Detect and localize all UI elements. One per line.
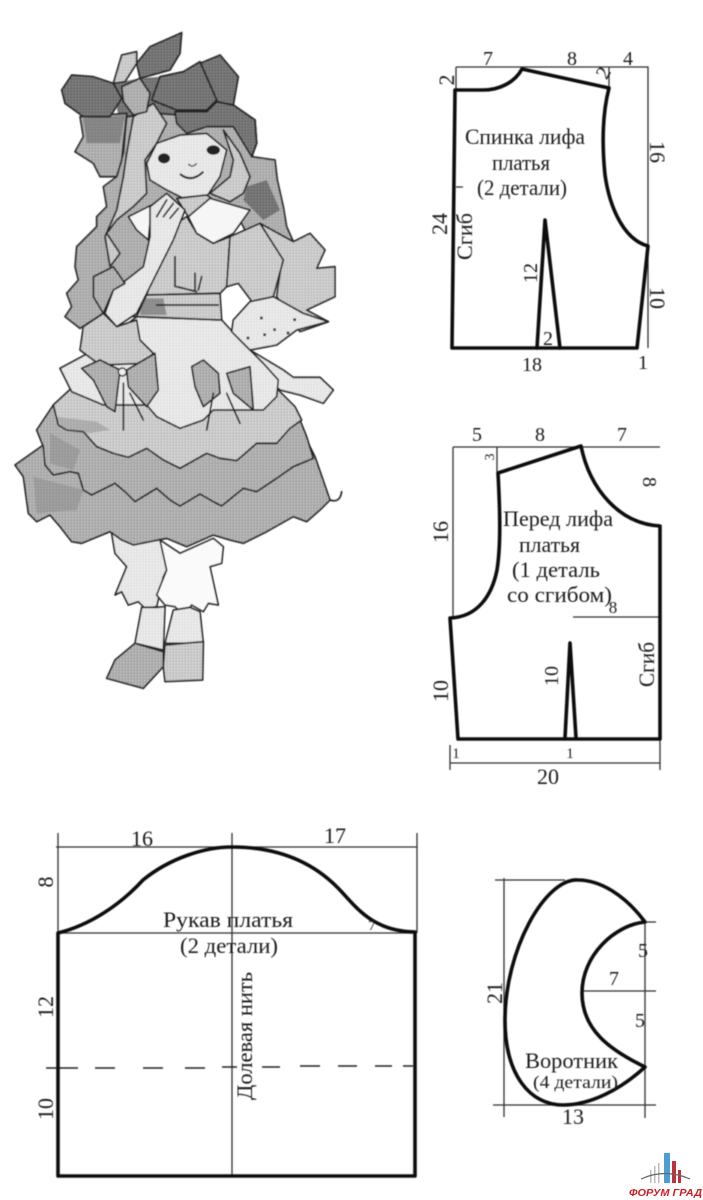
front bodice dart <box>565 643 576 738</box>
front bodice measurements: 1 <box>566 746 574 762</box>
logo: Forum Grad <box>629 1153 702 1199</box>
front bodice measurements: 16 <box>428 521 453 543</box>
top bow loop <box>137 33 182 78</box>
doll raised arm and hand <box>105 193 185 327</box>
doll eyes and mouth <box>158 145 220 178</box>
back bodice measurements: 24 <box>427 213 452 235</box>
front bodice title: Перед лифа <box>503 506 613 531</box>
doll belt shadow <box>140 298 167 315</box>
front bodice fold label: Сгиб <box>634 642 659 687</box>
sleeve measurements: 7 <box>368 918 376 934</box>
doll bow tail shadow <box>83 115 125 143</box>
doll puff sleeve <box>227 223 283 303</box>
doll bodice pleats <box>157 257 218 305</box>
back bodice fold label: Сгиб <box>452 213 477 260</box>
doll left collar <box>128 205 152 240</box>
doll face <box>147 133 227 200</box>
back bodice measurements: 2 <box>434 74 459 86</box>
sleeve measurements: 17 <box>324 823 346 848</box>
sleeve measurements: 16 <box>131 826 153 851</box>
bow knot <box>122 78 150 115</box>
front bodice measurements: 7 <box>617 424 627 446</box>
front bodice measurements: 8 <box>609 598 617 617</box>
back bodice measurements: 8 <box>567 48 577 70</box>
back bodice measurements: 18 <box>522 354 542 376</box>
small bow flower <box>113 52 137 83</box>
back bodice measurements: 10 <box>645 287 670 309</box>
doll hair dark side ringlets <box>243 180 280 220</box>
front bodice measurements: 5 <box>472 424 482 446</box>
sleeve measurements: 12 <box>33 996 58 1018</box>
sleeve title <box>163 907 293 958</box>
back bodice title: платья <box>492 150 550 175</box>
doll toy bunny <box>80 313 153 365</box>
doll right face lock <box>210 130 250 202</box>
doll right shoe <box>163 642 203 682</box>
sleeve title: (2 детали) <box>180 933 278 958</box>
doll skirt middle tier <box>37 390 313 506</box>
doll toy ear <box>93 267 125 313</box>
doll hair upper mass <box>65 102 293 328</box>
doll fingers <box>157 200 178 218</box>
front bodice measurements: 8 <box>638 477 660 487</box>
front bodice measurements: 1 <box>452 746 460 762</box>
collar measurements: 21 <box>482 982 507 1004</box>
front bodice measurements: 10 <box>428 680 453 702</box>
front bodice title <box>503 506 613 607</box>
back bodice outline <box>452 69 648 348</box>
collar title <box>525 1048 618 1093</box>
doll cuff <box>232 297 328 350</box>
doll bodice <box>147 217 230 295</box>
front bodice measurements: 8 <box>535 424 545 446</box>
sleeve outline <box>58 847 415 1176</box>
sleeve title: Рукав платья <box>163 907 293 932</box>
back bodice measurements: 2 <box>592 63 616 83</box>
front bodice measurements <box>428 424 660 789</box>
doll darker hair above forehead <box>175 102 257 157</box>
doll dress bow left <box>82 353 158 430</box>
sleeve grain label: Долевая нить <box>232 972 257 1100</box>
doll cuff dots <box>247 317 296 339</box>
doll hair lower right lock <box>260 223 335 332</box>
illustration: doll in a tiered dress <box>15 33 342 688</box>
back bodice title <box>465 124 585 200</box>
pattern: sleeve <box>33 823 417 1176</box>
collar measurements: 7 <box>609 968 619 990</box>
collar frame <box>493 878 656 1118</box>
front bodice measurements: 20 <box>537 764 559 789</box>
bow on head <box>62 33 217 117</box>
doll right bloomer <box>157 538 223 615</box>
front bodice measurements: 10 <box>541 666 563 686</box>
collar title: (4 детали) <box>533 1072 618 1093</box>
doll bow curl behind <box>200 55 238 105</box>
doll apron <box>60 317 278 428</box>
doll bloomers <box>112 533 223 615</box>
doll dress bow right <box>192 360 253 430</box>
collar outline <box>505 880 645 1105</box>
doll skirt upper tier <box>53 370 302 468</box>
doll chin neck <box>177 195 213 217</box>
sleeve measurements: 10 <box>33 1098 58 1120</box>
back bodice measurements: 7 <box>483 48 493 70</box>
back bodice measurements <box>427 48 670 376</box>
pattern: collar <box>482 878 656 1129</box>
back bodice measurements: 12 <box>520 263 542 283</box>
back bodice dart <box>537 220 560 348</box>
collar title: Воротник <box>525 1048 618 1073</box>
logo bars <box>641 1153 690 1183</box>
front bodice title: со сгибом) <box>507 582 612 607</box>
sleeve measurements: 8 <box>33 876 58 888</box>
back bodice title: Спинка лифа <box>465 124 585 149</box>
doll legs <box>135 607 203 650</box>
sleeve dashed fold line <box>46 1066 413 1068</box>
doll skirt bottom tier <box>15 390 330 547</box>
doll left eye <box>158 153 170 163</box>
doll hair bow tail <box>75 113 127 177</box>
doll mouth <box>180 172 203 178</box>
sleeve frame and grain lines <box>56 833 417 1176</box>
doll right collar <box>188 198 250 243</box>
back bodice measurements: 4 <box>623 48 633 70</box>
collar measurements: 5 <box>635 1010 645 1032</box>
collar measurements: 5 <box>638 940 648 962</box>
doll nose <box>188 163 197 166</box>
doll belt <box>137 293 222 320</box>
ruffle curl <box>330 492 342 501</box>
back bodice measurements: 1 <box>638 352 648 374</box>
back bodice frame <box>456 67 648 348</box>
front bodice frame <box>450 447 660 770</box>
front bodice title: платья <box>519 532 580 557</box>
back bodice measurements: 16 <box>645 141 670 163</box>
doll head backing <box>113 63 257 197</box>
skirt shading <box>33 417 110 513</box>
front bodice title: (1 деталь <box>512 557 600 582</box>
collar measurements <box>482 940 648 1129</box>
front bodice outline <box>450 446 660 739</box>
sleeve measurements <box>33 823 376 1120</box>
collar measurements: 13 <box>562 1104 584 1129</box>
back bodice title: (2 детали) <box>477 175 567 200</box>
doll light hair framing face <box>105 103 167 267</box>
logo wordmark: ФОРУМ ГРАД <box>629 1188 702 1199</box>
front bodice measurements: 3 <box>483 454 498 460</box>
pattern: back bodice <box>427 48 670 376</box>
right bow loop <box>152 62 217 110</box>
doll right arm <box>250 350 333 403</box>
left bow loop <box>62 75 122 117</box>
doll left shoe <box>107 643 163 688</box>
back bodice measurements: 2 <box>543 328 553 350</box>
doll left bloomer <box>112 533 168 608</box>
pattern: front bodice <box>428 424 660 789</box>
doll right eye <box>207 145 220 155</box>
